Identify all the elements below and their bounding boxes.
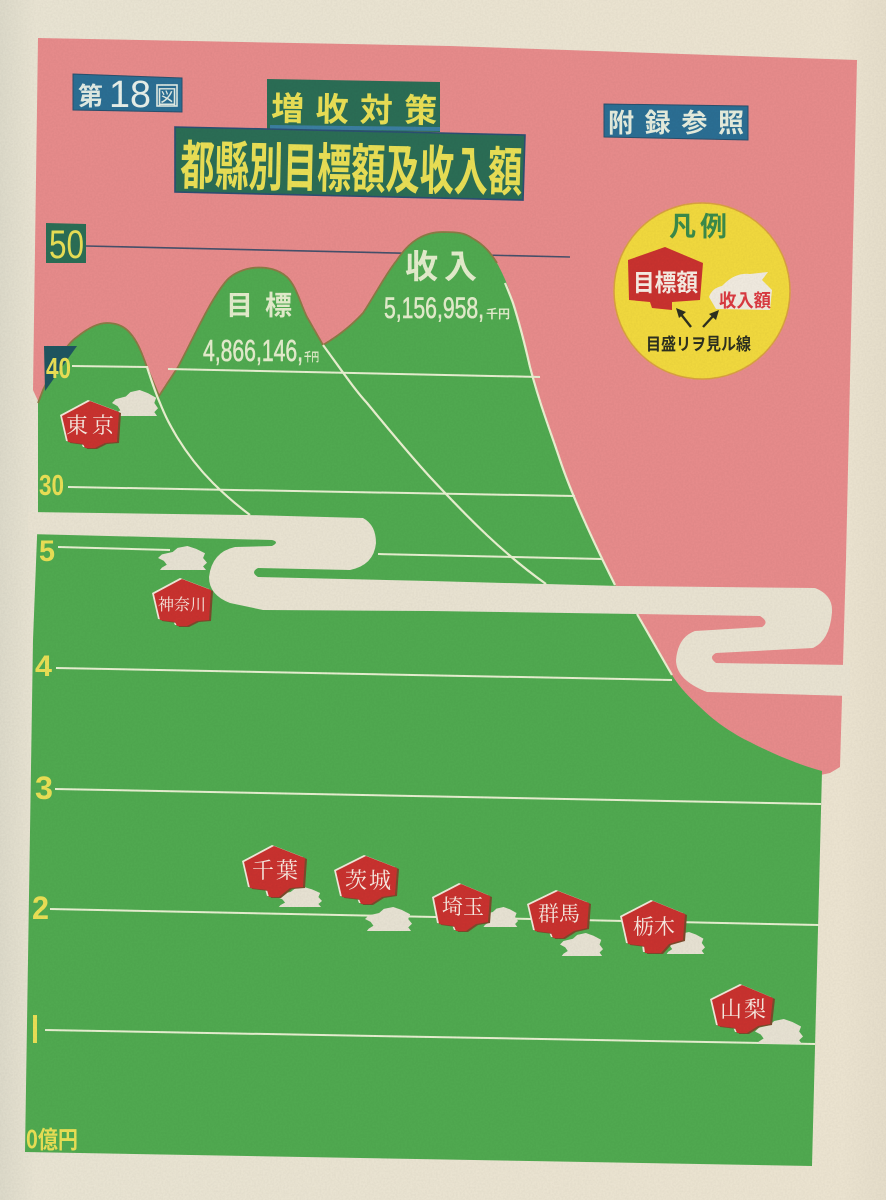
peak label: income: 5,156,958, bbox=[384, 292, 484, 325]
main title: 都縣別目標額及收入額 bbox=[180, 124, 523, 207]
axis label: 50: 50 bbox=[49, 223, 84, 267]
prefecture: Saitama: 埼玉 bbox=[442, 891, 484, 921]
figure number badge: 第 bbox=[78, 77, 103, 113]
prefecture: Chiba bbox=[242, 845, 322, 907]
prefecture: Saitama bbox=[432, 883, 518, 932]
legend note: 目盛リヲ見ル線 bbox=[646, 330, 751, 355]
figure number badge: 図 bbox=[157, 81, 177, 110]
legend title: 凡例 bbox=[669, 205, 727, 244]
legend arrows bbox=[676, 308, 719, 327]
axis label: 40: 40 bbox=[46, 353, 71, 385]
legend cloud: income bbox=[709, 272, 772, 310]
peak label: income: 千円 bbox=[486, 305, 510, 322]
axis label: 30: 30 bbox=[39, 470, 64, 502]
prefecture: Yamanashi: 山梨 bbox=[720, 993, 766, 1024]
prefecture: Ibaraki bbox=[334, 855, 412, 931]
prefecture: Chiba: 千葉 bbox=[252, 854, 298, 885]
legend label: target: 目標額 bbox=[633, 263, 698, 298]
prefecture: Tochigi: 栃木 bbox=[633, 911, 675, 941]
prefecture: Ibaraki: 茨城 bbox=[345, 864, 391, 895]
axis label: 0 oku yen: 0億円 bbox=[26, 1120, 78, 1155]
main title bbox=[175, 124, 525, 207]
mountain ridge outline bbox=[38, 232, 497, 403]
figure number badge bbox=[73, 74, 182, 116]
peak label: target: 目標 bbox=[226, 284, 292, 323]
legend circle bbox=[614, 203, 790, 379]
peak label: income: 收入 bbox=[405, 240, 477, 288]
panel: pink sky bbox=[33, 38, 857, 800]
figure number badge: 18 bbox=[109, 74, 151, 116]
legend pentagon: target bbox=[628, 247, 703, 310]
legend label: income: 收入額 bbox=[719, 287, 771, 313]
peak label: income bbox=[384, 240, 510, 325]
scale lines on the mountains bbox=[45, 366, 821, 1044]
peak label: target bbox=[203, 284, 319, 368]
axis label: 1 bbox=[33, 1015, 37, 1043]
axis label: 2: 2 bbox=[32, 890, 49, 926]
prefecture: Gunma: 群馬 bbox=[538, 898, 580, 928]
axis label: 40 bbox=[44, 346, 77, 391]
prefecture: Tochigi bbox=[620, 900, 705, 954]
river band bbox=[28, 512, 850, 696]
prefecture: Gunma bbox=[527, 890, 603, 956]
axis label: 5: 5 bbox=[39, 535, 55, 568]
peak label: target: 千円 bbox=[304, 348, 319, 365]
line: 50 scale bbox=[86, 246, 570, 257]
prefecture: Tokyo: 東京 bbox=[66, 409, 114, 440]
panel: green mountains and plain bbox=[25, 232, 822, 1166]
appendix reference badge: 附録参照 bbox=[608, 103, 744, 140]
subtitle: 増收対策 bbox=[271, 82, 438, 132]
peak label: target: 4,866,146, bbox=[203, 333, 303, 368]
prefecture: Tokyo bbox=[60, 390, 158, 449]
axis label: 3: 3 bbox=[35, 770, 53, 806]
prefecture: Kanagawa bbox=[152, 546, 213, 627]
prefecture: Kanagawa: 神奈川 bbox=[158, 592, 206, 615]
mountain white slope lines bbox=[147, 283, 672, 675]
axis label: 4: 4 bbox=[35, 650, 52, 683]
prefecture: Yamanashi bbox=[710, 984, 803, 1044]
